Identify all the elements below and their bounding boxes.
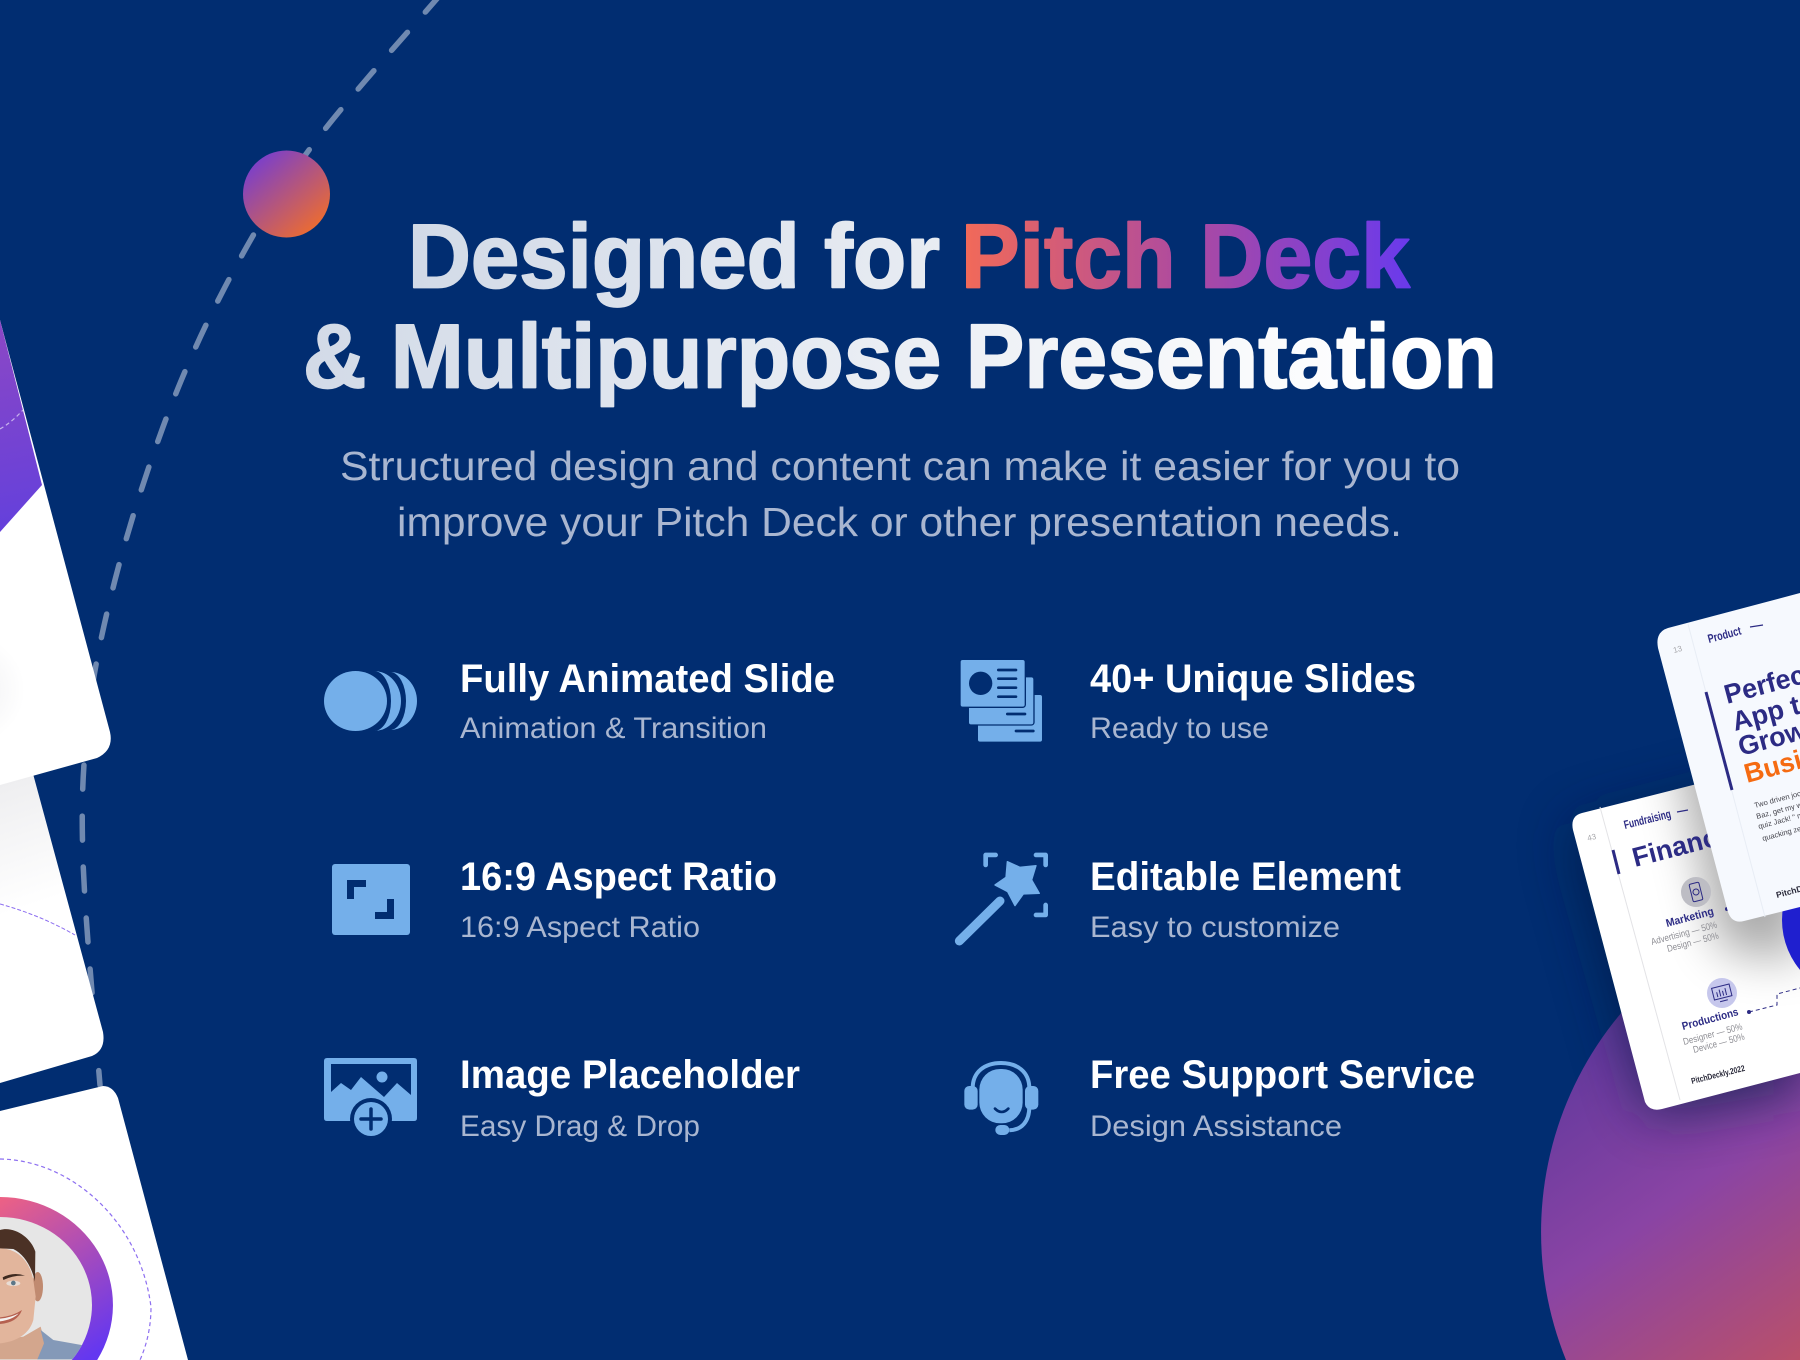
icon: magic wand [959,855,1046,941]
feature text [1090,1053,1475,1143]
productions text [1681,1006,1746,1086]
page number: 13 [1672,644,1684,655]
subtitle: improve your Pitch Deck or other presentation needs. [397,499,1402,545]
feature text: Animation & Transition [460,712,767,745]
gradient orb on arc [243,150,330,238]
feature text [460,657,835,745]
slide card: bottom with portrait [0,1086,188,1360]
feature text [1090,855,1401,944]
feature text: Fully Animated Slide [460,657,835,701]
feature text: Free Support Service [1090,1053,1475,1097]
portrait ring [0,1197,113,1360]
dashed orbit arc [82,0,441,1085]
title [303,206,1497,408]
blue donut chart [1782,842,1800,998]
productions icon [1707,978,1737,1008]
feature text: 40+ Unique Slides [1090,657,1416,701]
marketing text: Advertising — 50% [1650,920,1719,948]
feature text: Design Assistance [1090,1110,1342,1143]
page number: 43 [1586,832,1598,843]
right slide stack [1570,593,1800,1115]
marketing text [1650,906,1720,955]
icon: stacked slides [961,660,1042,742]
feature text: Image Placeholder [460,1053,800,1097]
feature: aspect ratio [332,855,777,944]
feature text [460,855,777,944]
feature: fully animated slide [324,657,835,745]
big gradient circle, bottom right [1541,902,1800,1360]
slide card: top with purple header [0,320,111,785]
marketing icon [1681,877,1711,907]
connector [1747,988,1800,1014]
heading: Finance [1629,818,1735,873]
section label: Product [1706,624,1743,646]
section label: Fundraising [1622,807,1672,832]
feature text: Easy to customize [1090,911,1340,944]
icon: aspect ratio frame [332,864,410,935]
product heading [1721,657,1800,789]
icon: image with plus [324,1058,417,1140]
card shadow [1570,770,1800,1115]
slide card: fundraising [1572,784,1800,1110]
slide card: product [1657,593,1800,922]
feature text [460,1053,800,1143]
feature: editable element [959,855,1401,944]
product body text [1753,787,1800,843]
productions text: Device — 50% [1692,1031,1746,1056]
feature text: Editable Element [1090,855,1401,899]
title: Designed for [408,206,940,308]
productions text: PitchDeckly.2022 [1690,1063,1746,1086]
feature: image placeholder [324,1053,800,1143]
productions text: Productions [1681,1006,1740,1033]
title: & Multipurpose Presentation [303,306,1497,408]
marketing text: Marketing [1665,906,1715,930]
portrait photo [0,1229,85,1359]
feature: unique slides [961,657,1416,745]
feature text: 16:9 Aspect Ratio [460,911,700,944]
productions text: Designer — 50% [1682,1021,1744,1048]
marketing text: Design — 50% [1666,930,1720,955]
icon: headset agent [964,1063,1038,1135]
feature text: Ready to use [1090,712,1269,745]
feature text: 16:9 Aspect Ratio [460,855,777,899]
subtitle [340,443,1460,545]
left slide stack [0,320,188,1360]
subtitle: Structured design and content can make it easier for you to [340,443,1460,489]
title: Pitch Deck [961,206,1411,308]
feature: free support [964,1053,1475,1143]
feature text [1090,657,1416,745]
feature text: Easy Drag & Drop [460,1110,700,1143]
icon: overlapping circles [324,671,417,731]
slide card: middle [0,770,104,1083]
